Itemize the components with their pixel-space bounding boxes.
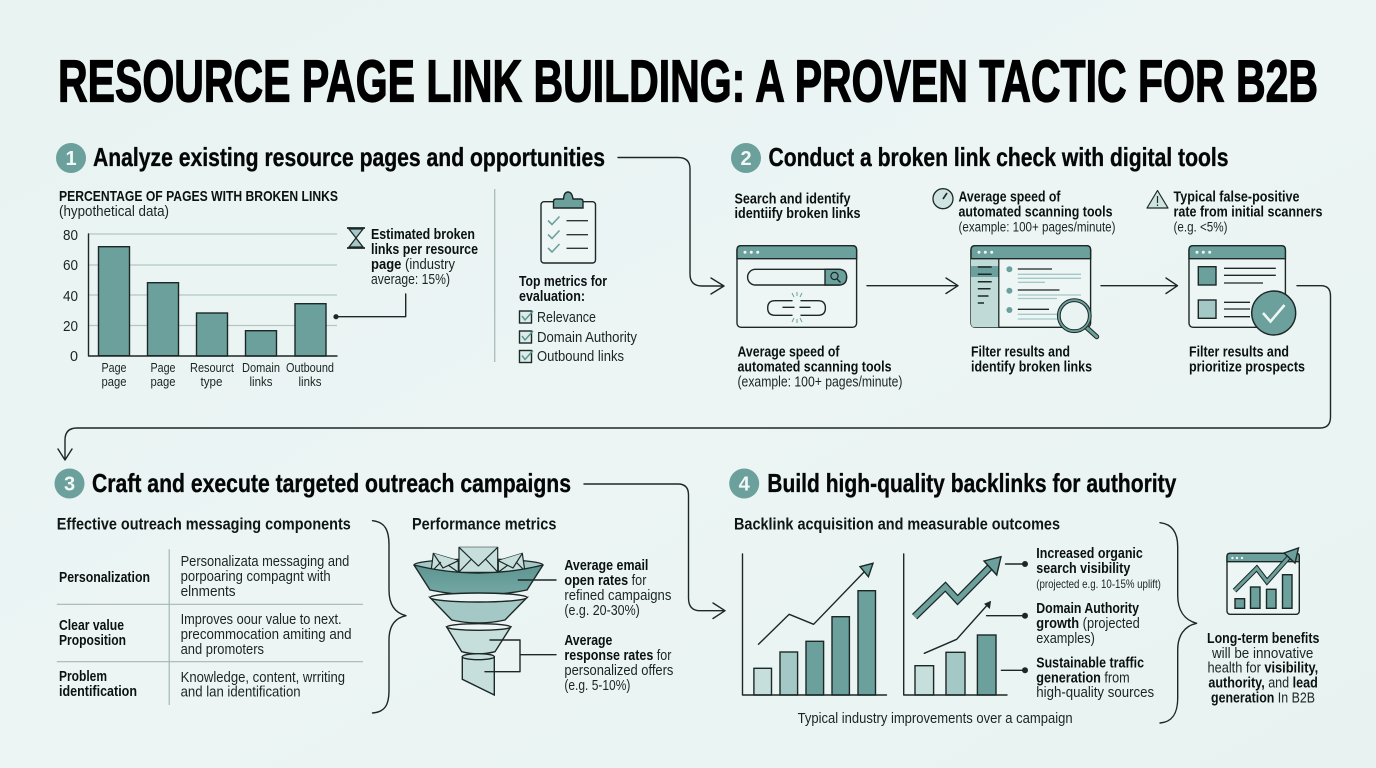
text: prioritize prospects [1189,344,1305,376]
text: scanning speed: Average speed of [958,190,1061,206]
callout: estimated broken links: Estimated broken [371,227,475,243]
text: email open rates: (e.g. 20-30%) [564,603,640,619]
text: filter results: Filter results and [971,344,1070,360]
table: messaging components: and lan identification [181,684,301,700]
text: speed under browser 1: (example: 100+ pages/minute) [738,374,902,390]
text: sustainable traffic: Sustainable traffic [1036,656,1144,672]
bar chart: broken links: links [250,375,272,389]
top metrics list: Relevance [537,310,596,326]
top metrics list: Domain Authority [537,330,638,346]
table: messaging components: Personalization [59,570,150,586]
text: scanning speed: (example: 100+ pages/minute) [958,220,1116,234]
panel: step 4 backlinks [729,468,1319,727]
performance metrics heading: Performance metrics [412,516,556,534]
text: prioritize prospects: prioritize prospects [1189,360,1305,376]
step 3 number badge: 3 [64,474,75,496]
bar chart: broken links: page [150,375,176,389]
table: messaging components: identification [59,684,137,700]
chart title: PERCENTAGE OF PAGES WITH BROKEN LINKS [59,188,338,205]
table: messaging components [57,549,363,705]
top metrics list [519,274,638,365]
growth chart 2 [904,554,1007,695]
chart caption: Typical industry improvements over a campaign [798,711,1073,727]
text: search and identify [734,192,860,222]
text: filter results [971,344,1092,376]
text: false positive rate: rate from initial scanners [1174,204,1322,220]
arrow: step 2 to step 3 [58,286,1330,460]
table: messaging components: Improves oour value to next. [181,612,342,628]
text: email open rates [564,558,671,619]
arrow: step 3 to step 4 [584,484,725,618]
step 3 heading: Craft and execute targeted outreach campaigns [92,468,571,498]
text: sustainable traffic: generation from [1036,670,1130,686]
text: speed under browser 1 [738,344,902,390]
step 4 number badge: 4 [739,474,751,496]
callout: estimated broken links: page (industry [371,257,456,273]
table: messaging components: porpoaring compagnt with [181,569,331,585]
text: search and identify: Search and identify [734,192,850,208]
text: response rates: Average [564,633,612,649]
icon: growth dashboard [1227,548,1299,614]
callout: estimated broken links [371,227,478,288]
text: long-term benefits: will be innovative [1211,646,1313,662]
table: messaging components: Knowledge, content, wrriting [181,670,345,686]
step 3 number badge [54,468,84,498]
bar chart: broken links [63,228,337,389]
table: messaging components: Clear value [59,618,124,634]
text: speed under browser 1: automated scanning tools [738,360,892,376]
outcome connector dots [987,561,1028,673]
panel: step 1 analyze [56,142,638,389]
messaging components heading: Effective outreach messaging components [57,516,351,534]
text: scanning speed [958,190,1116,234]
bar chart: broken links: 80 [63,228,78,244]
brace: outcomes to benefits [1160,523,1197,723]
text: search and identify: identiify broken links [734,206,860,222]
text: response rates: personalized offers [564,663,673,679]
bar chart: broken links: Domain [242,361,280,375]
icon: hourglass [347,228,365,248]
text: organic visibility [1036,546,1161,591]
brace: components to metrics [372,521,406,713]
bar chart: broken links: type [200,375,223,389]
text: email open rates: open rates for [564,573,647,589]
text: organic visibility: (projected e.g. 10-15% uplift) [1036,577,1161,591]
top metrics list: Outbound links [537,349,624,365]
chart title [59,188,338,220]
text: sustainable traffic [1036,656,1154,701]
icon: warning triangle [1147,190,1168,208]
text: email open rates: refined campaigns [564,588,671,604]
table: messaging components: precommocation amiting and [181,627,352,643]
text: response rates [564,633,673,694]
table: messaging components: elnments [181,584,236,600]
arrow: browser 2 to browser 3 [1101,278,1178,294]
bar chart: broken links: Page [150,361,176,375]
text: false positive rate [1174,190,1322,234]
icon: browser with prioritized list and check badge [1189,246,1296,335]
chart callout leader line [333,294,406,319]
top metrics list: Top metrics for [519,274,607,290]
text: response rates: (e.g. 5-10%) [564,678,630,694]
bar chart: broken links: 40 [63,289,78,305]
arrow: browser 1 to browser 2 [867,278,958,294]
text: domain authority growth: examples) [1036,631,1095,647]
table: messaging components: Problem [59,669,107,685]
bar chart: broken links: 0 [70,349,78,365]
top metrics list: evaluation: [519,289,585,305]
bar chart: broken links: page [102,375,127,389]
text: long-term benefits: authority, and lead [1208,676,1318,692]
text: domain authority growth: Domain Authority [1036,601,1139,617]
text: organic visibility: search visibility [1036,561,1130,577]
text: false positive rate: Typical false-positive [1174,190,1300,206]
text: sustainable traffic: high-quality sources [1036,685,1154,701]
text: response rates: response rates for [564,648,672,664]
text: speed under browser 1: Average speed of [738,344,840,360]
text: email open rates: Average email [564,558,648,574]
text: organic visibility: Increased organic [1036,546,1143,562]
text: long-term benefits: generation In B2B [1211,690,1315,706]
step 1 heading: Analyze existing resource pages and opportunities [93,142,605,172]
text: scanning speed: automated scanning tools [958,204,1112,220]
bar chart: broken links: Outbound [286,361,334,375]
text: domain authority growth: growth (projected [1036,616,1140,632]
funnel with envelopes [414,547,556,695]
backlink outcomes heading: Backlink acquisition and measurable outcomes [734,516,1060,534]
text: long-term benefits: health for visibility, [1208,660,1318,676]
table: messaging components: Personalizata messaging and [181,554,349,570]
step 2 number badge [731,143,761,173]
text: domain authority growth [1036,601,1140,647]
growth chart 1 [742,554,886,695]
text: long-term benefits [1207,631,1319,706]
chart title: (hypothetical data) [59,204,169,220]
step 4 number badge [729,468,759,498]
text: prioritize prospects: Filter results and [1189,344,1289,360]
step 4 heading: Build high-quality backlinks for authority [767,468,1177,498]
bar chart: broken links: Page [102,361,127,375]
icon: browser with search and broken link [737,246,857,327]
panel: step 2 broken link check [731,142,1322,390]
icon: timer [933,189,953,209]
table: messaging components: Proposition [59,633,126,649]
table: messaging components: and promoters [181,642,264,658]
step 1 number badge [56,143,86,173]
arrow: step 1 to step 2 [618,158,724,294]
text: long-term benefits: Long-term benefits [1207,631,1319,647]
icon: browser with results and magnifier [971,246,1097,337]
callout: estimated broken links: links per resource [371,242,478,258]
panel: step 3 outreach [54,468,673,713]
step 2 heading: Conduct a broken link check with digital tools [768,142,1228,172]
step 2 number badge: 2 [740,148,752,170]
bar chart: broken links: Resourct [190,361,234,375]
text: false positive rate: (e.g. <5%) [1174,220,1228,234]
bar chart: broken links: 20 [63,319,78,335]
bar chart: broken links: 60 [63,258,78,274]
text: filter results: identify broken links [971,360,1092,376]
bar chart: broken links: links [298,375,322,389]
icon: clipboard [541,192,596,263]
step 1 number badge: 1 [65,148,77,170]
callout: estimated broken links: average: 15%) [371,272,450,288]
